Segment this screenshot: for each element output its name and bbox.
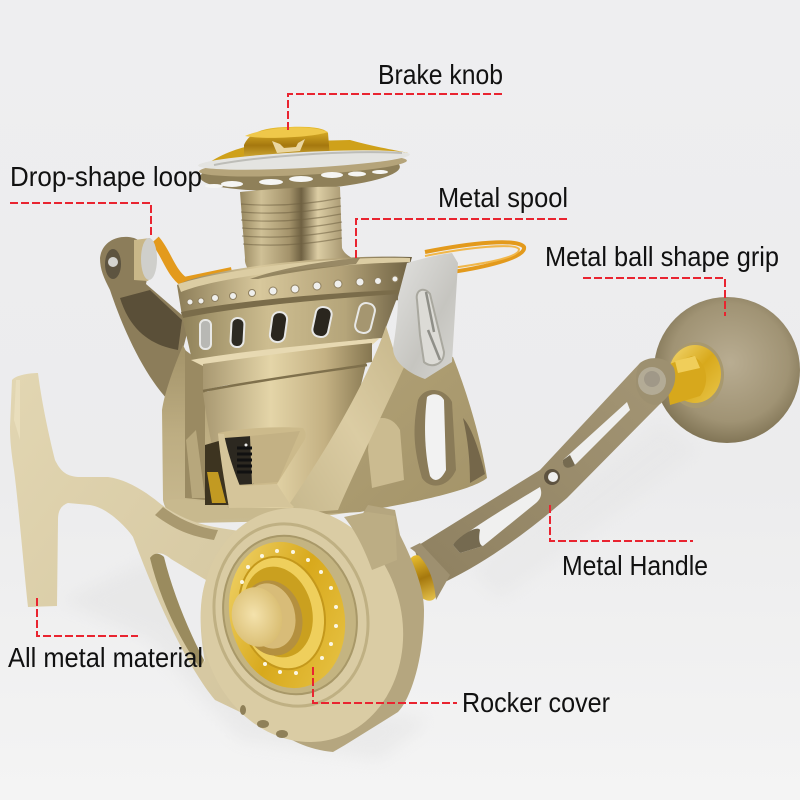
callout: all metal material: All metal material xyxy=(8,642,203,673)
dark pocket xyxy=(205,440,240,505)
hole in gusset xyxy=(153,553,206,662)
gold ring xyxy=(214,529,360,701)
callout: drop-shape loop: Drop-shape loop xyxy=(10,161,202,192)
lower band xyxy=(203,343,372,390)
callout: brake knob: Brake knob xyxy=(378,59,503,90)
panel: metal spool xyxy=(198,127,410,278)
panel: frame back band xyxy=(162,345,367,523)
callout: metal ball shape grip xyxy=(545,241,779,316)
callout: metal spool: Metal spool xyxy=(438,182,568,213)
callout: brake knob xyxy=(288,59,503,130)
icon: spring xyxy=(237,448,252,472)
ribbed nut xyxy=(234,574,310,662)
panel: handle arm xyxy=(402,359,672,605)
panel: rotor xyxy=(177,257,412,508)
icon: metal ball grip xyxy=(636,297,800,443)
vents at plate base xyxy=(240,705,288,738)
callout: metal ball shape grip: Metal ball shape grip xyxy=(545,241,779,272)
icon: gold bearing ring xyxy=(402,551,444,605)
icon: line roller arm xyxy=(100,237,190,400)
top plate xyxy=(177,257,412,322)
right body xyxy=(300,345,487,514)
callout: metal handle: Metal Handle xyxy=(562,550,708,581)
icon: knob cap xyxy=(225,582,289,652)
icon: silver bail arm xyxy=(393,253,458,379)
flange underside xyxy=(199,149,401,195)
callout: metal spool xyxy=(356,182,568,258)
panel: gear side plate xyxy=(176,486,428,764)
callout: all metal material xyxy=(8,598,203,673)
trapezoid window xyxy=(218,427,306,488)
panel: foot bracket xyxy=(10,373,265,720)
lower cone xyxy=(203,340,372,508)
icon: brake knob xyxy=(203,127,408,167)
callout: rocker cover xyxy=(313,667,610,718)
diagonal strut xyxy=(290,326,405,513)
window band xyxy=(181,290,400,360)
callout: drop-shape loop xyxy=(10,161,202,238)
flange silver rim xyxy=(198,146,410,174)
dots xyxy=(187,276,398,305)
windows xyxy=(200,302,376,349)
callout: metal handle xyxy=(550,505,708,581)
panel: reel body frame xyxy=(205,253,487,514)
icon: orange bail wire xyxy=(155,240,524,282)
soft ground shadows xyxy=(60,420,700,760)
callout: rocker cover: Rocker cover xyxy=(462,687,610,718)
